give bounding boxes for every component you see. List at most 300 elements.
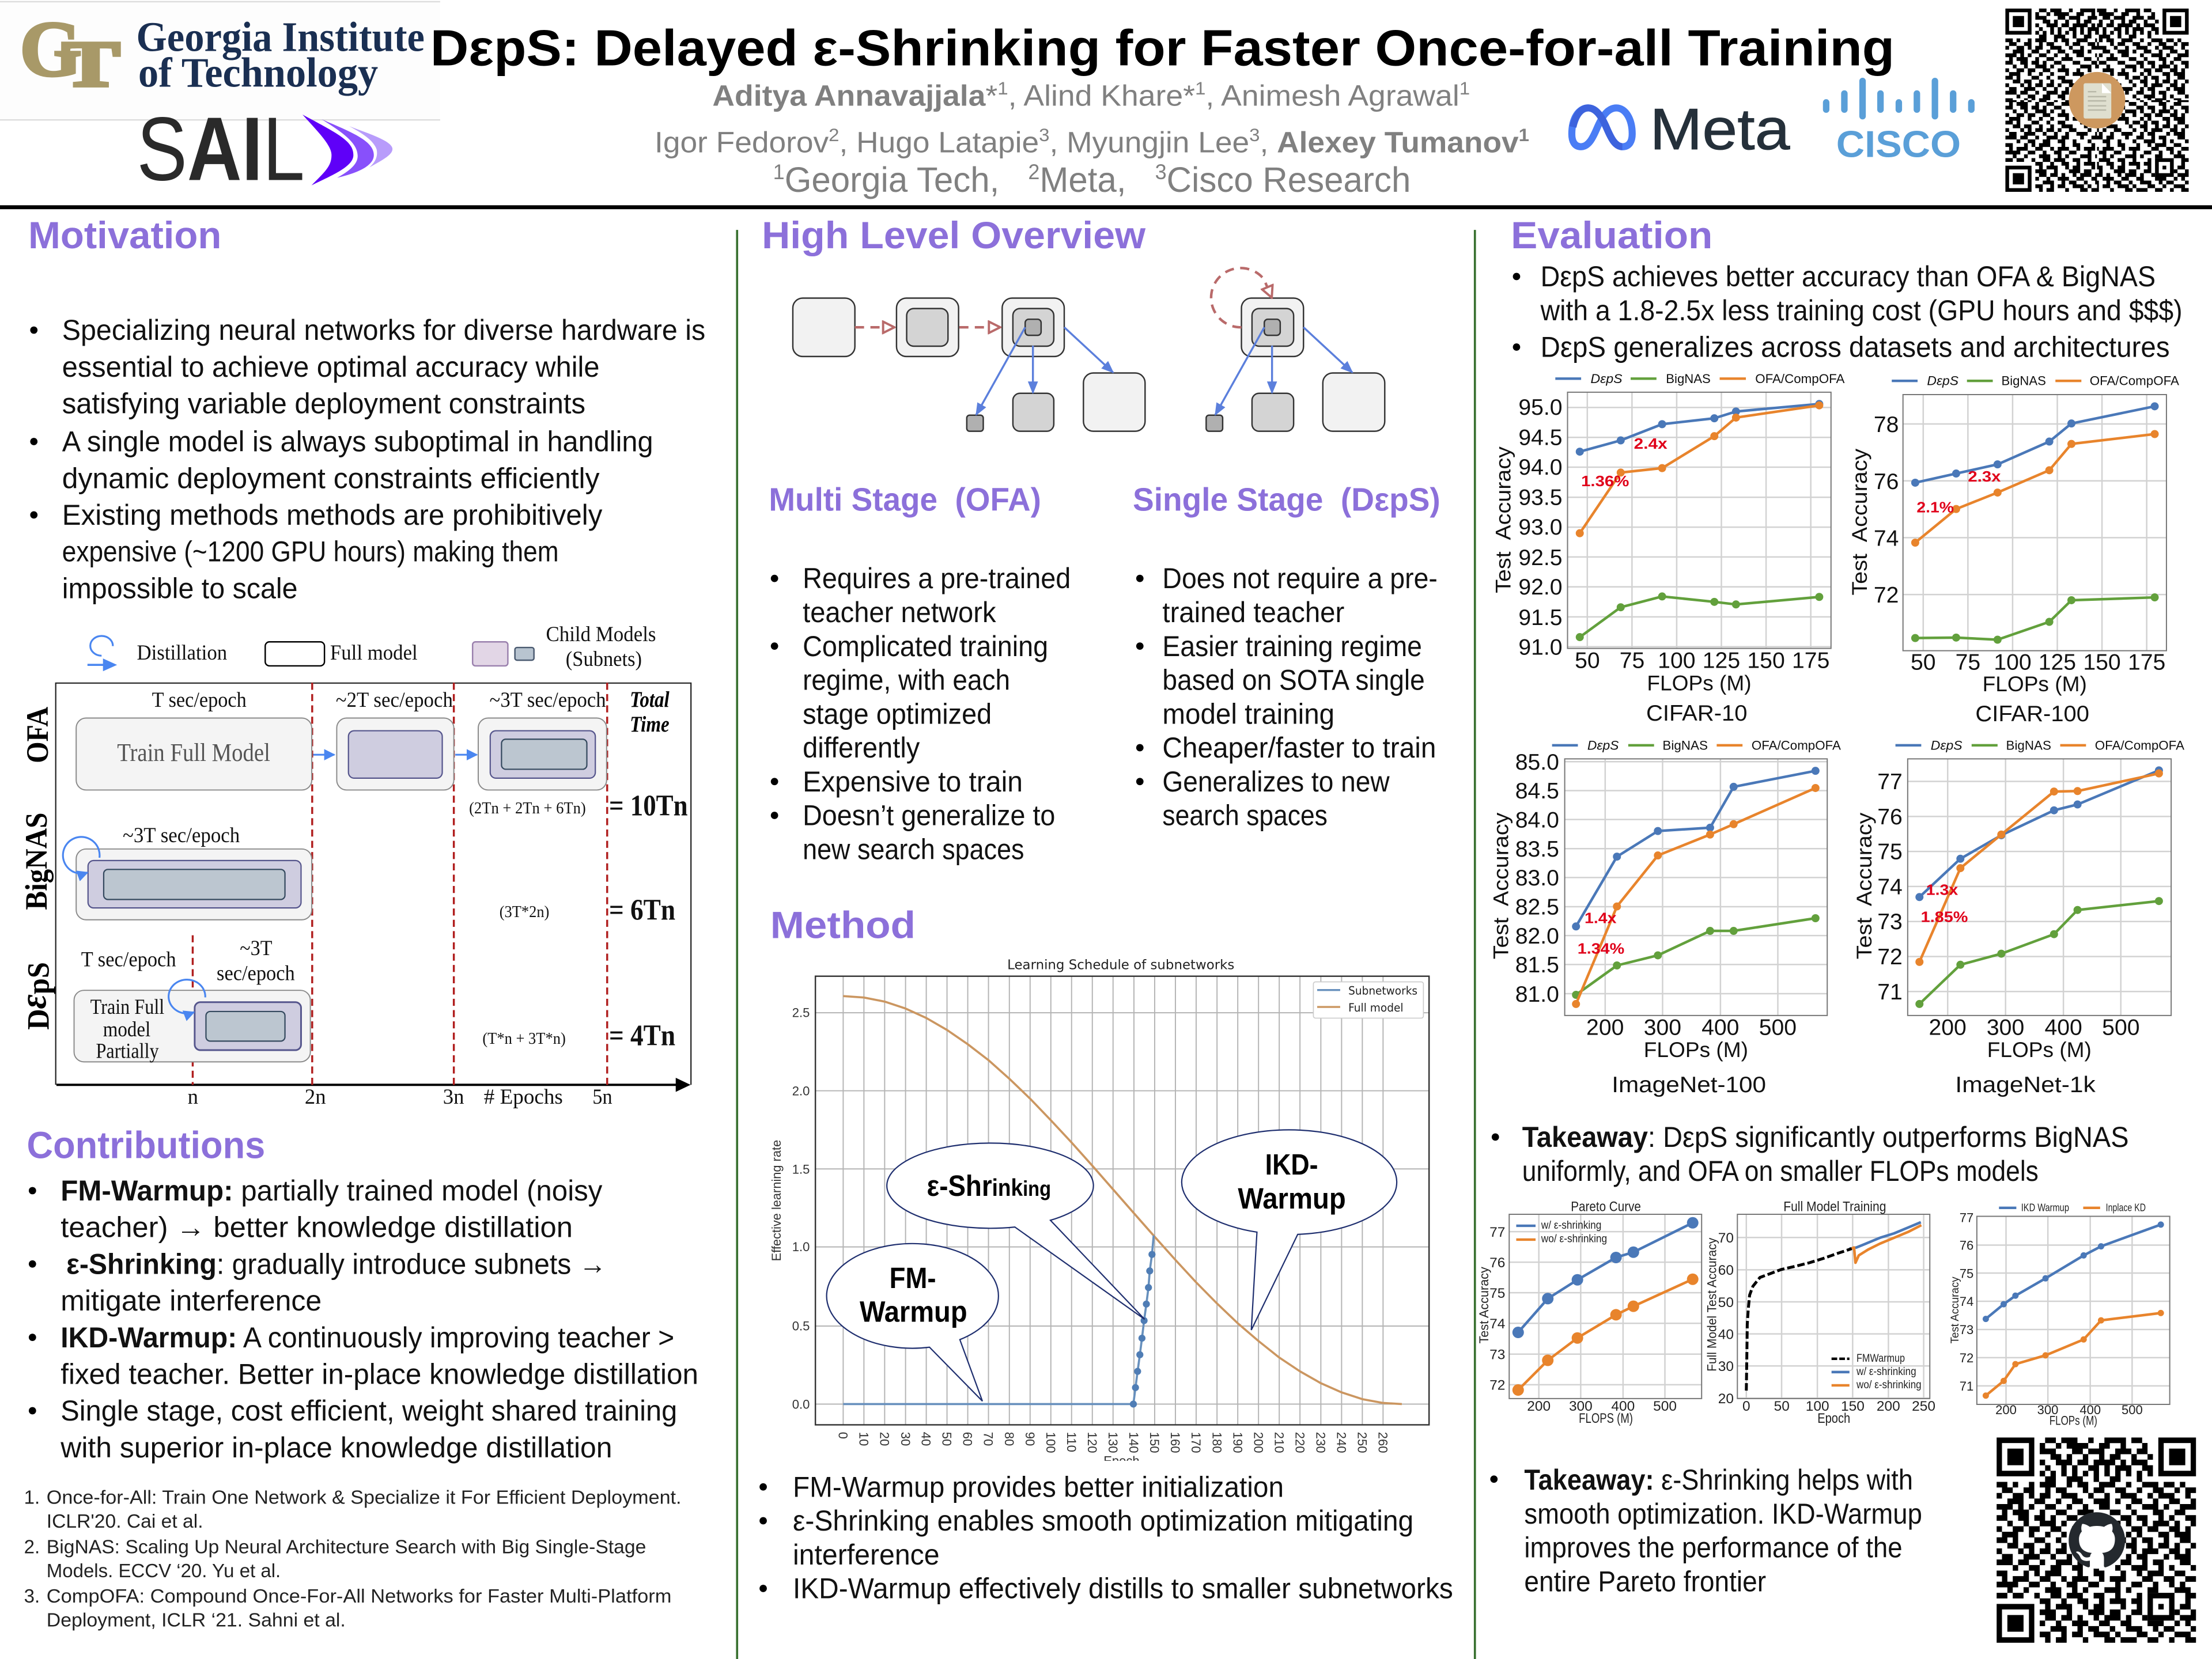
- chart: CIFAR-10: [1492, 372, 1845, 726]
- chart: CIFAR-10: 94.0: [1518, 455, 1563, 480]
- motivation bullets: satisfying variable deployment constraints: [62, 388, 585, 420]
- epoch axis labels: # Epochs: [484, 1085, 563, 1108]
- references: Models. ECCV ‘20. Yu et al.: [47, 1560, 281, 1582]
- chart: ImageNet-100: 81.0: [1515, 982, 1559, 1007]
- x axis tick labels: 160: [1168, 1432, 1182, 1453]
- authors line 1: 1: [997, 78, 1008, 99]
- chart: IKD Warmup vs Inplace KD: 500: [2122, 1403, 2143, 1417]
- motivation bullets: dynamic deployment constraints efficiently: [62, 462, 600, 494]
- heading: Evaluation: Evaluation: [1511, 214, 1712, 257]
- heading: Contributions: Contributions: [27, 1124, 265, 1167]
- title: DεpS: Delayed ε-Shrinking for Faster Once-for-all Training: [430, 19, 1895, 76]
- callout: e-Shrinking: ε-Shrinking: [927, 1169, 1051, 1202]
- chart: CIFAR-100: 150: [2083, 650, 2121, 675]
- chart: CIFAR-100: BigNAS: [2001, 374, 2046, 388]
- row: OFA: Train Full Model: [117, 738, 270, 767]
- chart: CIFAR-100: DεpS: [1927, 374, 1958, 388]
- row: DepS: (T*n + 3T*n): [482, 1030, 566, 1048]
- takeaway 1: [1492, 1121, 2129, 1187]
- chart: Full Model Training: [1704, 1199, 1935, 1426]
- chart: Full Model Training: 30: [1718, 1359, 1734, 1374]
- chart: Full Model Training: 70: [1718, 1230, 1734, 1246]
- chart: CIFAR-10: 150: [1747, 648, 1785, 673]
- single stage bullets: based on SOTA single: [1162, 664, 1425, 696]
- logo panel: Georgia Institute of Technology: of Technology: [138, 49, 378, 96]
- chart: ImageNet-100: 200: [1586, 1015, 1624, 1040]
- panel: motivation: [28, 214, 705, 604]
- chart: CIFAR-100: 2.3x: [1968, 469, 2001, 485]
- logo panel: Georgia Institute of Technology: G: [20, 5, 82, 93]
- chart: ImageNet-100: FLOPs (M): [1644, 1038, 1748, 1062]
- x axis tick labels: 210: [1272, 1432, 1286, 1453]
- chart: ImageNet-1k: 77: [1877, 770, 1903, 794]
- y axis tick labels: 0.0: [792, 1397, 810, 1411]
- callout: IKD-Warmup: IKD-: [1265, 1147, 1318, 1181]
- chart: Pareto Curve: Test Accuracy: [1477, 1267, 1491, 1343]
- chart legend: Subnetworks: [1348, 984, 1417, 998]
- chart: CIFAR-100: 72: [1874, 583, 1899, 608]
- affiliations: 3: [1155, 160, 1167, 184]
- chart: IKD Warmup vs Inplace KD: 200: [1995, 1403, 2017, 1417]
- x axis tick labels: 60: [961, 1432, 975, 1446]
- chart: IKD Warmup vs Inplace KD: [1949, 1201, 2170, 1428]
- x axis tick labels: 80: [1002, 1432, 1016, 1446]
- panel: contributions: [27, 1124, 698, 1464]
- references: 2.: [24, 1536, 40, 1558]
- takeaway 2: entire Pareto frontier: [1524, 1565, 1766, 1597]
- chart: CIFAR-100: 74: [1874, 527, 1899, 551]
- chart: IKD Warmup vs Inplace KD: 76: [1960, 1238, 1973, 1253]
- multi stage bullets: differently: [803, 732, 920, 764]
- chart: IKD Warmup vs Inplace KD: Test Accuracy: [1949, 1277, 1961, 1343]
- x axis tick labels: 230: [1314, 1432, 1328, 1453]
- x axis tick labels: 0: [836, 1432, 850, 1439]
- chart: CIFAR-10: 75: [1620, 648, 1644, 673]
- chart: Pareto Curve: 300: [1569, 1399, 1593, 1414]
- chart: IKD Warmup vs Inplace KD: Inplace KD: [2106, 1201, 2146, 1213]
- authors line 2: , Myungjin Lee: [1050, 125, 1249, 158]
- references: ICLR'20. Cai et al.: [47, 1511, 203, 1532]
- logo: Meta: [1572, 96, 1790, 162]
- chart: learning schedule of subnetworks: [769, 957, 1429, 1469]
- chart: CIFAR-100: OFA/CompOFA: [2090, 374, 2179, 388]
- references: [24, 1487, 682, 1631]
- chart: CIFAR-10: Test Accuracy: [1492, 446, 1515, 593]
- heading: High Level Overview: High Level Overview: [762, 214, 1146, 257]
- authors line 2: 3: [1249, 124, 1260, 145]
- chart: Full Model Training: 40: [1718, 1327, 1734, 1343]
- evaluation bullets: DεpS generalizes across datasets and architectures: [1541, 331, 2170, 363]
- row: OFA: ~2T sec/epoch: [336, 688, 453, 711]
- chart: Pareto Curve: w/ ε-shrinking: [1541, 1219, 1601, 1232]
- method bullets: interference: [793, 1539, 940, 1571]
- row: DepS: pS: [21, 962, 55, 994]
- x axis tick labels: 90: [1023, 1432, 1037, 1446]
- chart: IKD Warmup vs Inplace KD: 300: [2037, 1403, 2058, 1417]
- chart: Full Model Training: 20: [1718, 1391, 1734, 1407]
- motivation bullets: Existing methods methods are prohibitively: [62, 499, 602, 531]
- x axis tick labels: 20: [878, 1432, 892, 1446]
- row: BigNAS: BigNAS: [19, 813, 54, 910]
- heading: Method: Method: [770, 904, 916, 947]
- diagram legend: [88, 622, 656, 671]
- authors line 2: ,: [1260, 125, 1277, 158]
- chart: ImageNet-1k: BigNAS: [2006, 738, 2051, 752]
- row: DepS: ~3T: [240, 936, 273, 960]
- diagram: multi stage: [793, 298, 1145, 431]
- chart: CIFAR-10: 92.0: [1518, 575, 1563, 600]
- x axis tick labels: 200: [1251, 1432, 1265, 1453]
- chart: Pareto Curve: 500: [1653, 1399, 1677, 1414]
- multi stage bullets: Doesn’t generalize to: [803, 800, 1055, 832]
- chart: CIFAR-10: 93.5: [1518, 486, 1563, 510]
- authors line 1: , Animesh Agrawal: [1205, 79, 1459, 112]
- callout: FM-Warmup: Warmup: [860, 1294, 967, 1328]
- x axis tick labels: 130: [1106, 1432, 1120, 1453]
- chart: Pareto Curve: Pareto Curve: [1571, 1199, 1641, 1214]
- y axis tick labels: 2.5: [792, 1006, 810, 1020]
- diagram legend: Full model: [330, 641, 418, 664]
- row: BigNAS: ~3T sec/epoch: [123, 823, 240, 847]
- chart: CIFAR-100: 50: [1911, 650, 1936, 675]
- affiliations: 1: [773, 160, 785, 184]
- chart: CIFAR-10: 100: [1658, 648, 1696, 673]
- takeaway 2: improves the performance of the: [1524, 1532, 1903, 1564]
- contributions bullets: teacher) → better knowledge distillation: [61, 1211, 573, 1244]
- chart: CIFAR-100: [1848, 374, 2179, 726]
- affiliations: 2: [1028, 160, 1039, 184]
- x axis tick labels: [836, 1432, 1390, 1469]
- chart: IKD Warmup vs Inplace KD: 400: [2079, 1403, 2101, 1417]
- callout: FM-Warmup: [827, 1244, 999, 1401]
- chart: CIFAR-100: 75: [1956, 650, 1980, 675]
- heading: Motivation: Motivation: [28, 214, 221, 257]
- chart: ImageNet-100: 82.0: [1515, 924, 1559, 949]
- row: OFA: Time: [630, 712, 670, 737]
- chart: ImageNet-1k: 74: [1877, 874, 1903, 899]
- row: OFA: Total: [630, 687, 670, 712]
- chart: Pareto Curve: wo/ ε-shrinking: [1541, 1232, 1607, 1245]
- chart: Pareto Curve: 72: [1489, 1378, 1505, 1393]
- chart: ImageNet-1k: 73: [1877, 910, 1903, 934]
- takeaway 1: uniformly, and OFA on smaller FLOPs models: [1522, 1155, 2039, 1187]
- row: DepS: D: [21, 1007, 55, 1030]
- chart: Full Model Training: FMWarmup: [1856, 1352, 1905, 1365]
- logo: SAIL: SAIL: [137, 99, 305, 199]
- chart: ImageNet-100: 81.5: [1515, 953, 1559, 978]
- chart: ImageNet-100: BigNAS: [1662, 738, 1708, 752]
- chart: IKD Warmup vs Inplace KD: 75: [1960, 1266, 1973, 1281]
- chart: ImageNet-100: 85.0: [1515, 750, 1559, 775]
- chart: CIFAR-100: Test Accuracy: [1848, 448, 1871, 595]
- logo panel: Georgia Institute of Technology: [0, 1, 440, 120]
- row: DepS: T sec/epoch: [81, 948, 176, 971]
- chart: CIFAR-100: 78: [1874, 412, 1899, 437]
- chart: Pareto Curve: 77: [1489, 1225, 1505, 1240]
- timeline diagram: training time comparison: [13, 622, 691, 1108]
- contributions bullets: FM-Warmup: partially trained model (noisy: [61, 1175, 602, 1207]
- chart: CIFAR-100: 100: [1994, 650, 2032, 675]
- diagram legend: Child Models: [546, 622, 656, 646]
- contributions bullets: fixed teacher. Better in-place knowledge distillation: [61, 1358, 698, 1390]
- chart: Full Model Training: w/ ε-shrinking: [1856, 1365, 1916, 1378]
- authors line 2: 2: [829, 124, 840, 145]
- authors line 2: 1: [1519, 124, 1529, 145]
- x axis tick labels: 70: [981, 1432, 996, 1446]
- takeaway 2: smooth optimization. IKD-Warmup: [1524, 1498, 1922, 1530]
- row: OFA: T sec/epoch: [152, 688, 247, 711]
- chart: IKD Warmup vs Inplace KD: IKD Warmup: [2021, 1201, 2069, 1213]
- references: Once-for-All: Train One Network & Specialize it For Efficient Deployment.: [47, 1487, 682, 1509]
- chart: CIFAR-10: FLOPs (M): [1647, 671, 1752, 695]
- chart: CIFAR-10: 91.0: [1518, 635, 1563, 660]
- chart: ImageNet-1k: 400: [2045, 1015, 2082, 1040]
- single stage bullets: Cheaper/faster to train: [1162, 732, 1436, 764]
- row: BigNAS: (3T*2n): [500, 903, 549, 921]
- authors line 2: Igor Fedorov: [655, 125, 822, 158]
- chart frame and axis: [56, 683, 691, 1092]
- chart: ImageNet-100: 1.4x: [1585, 911, 1617, 927]
- chart: Full Model Training: 150: [1841, 1399, 1865, 1414]
- single stage bullets: [1136, 562, 1438, 832]
- callout: e-Shrinking: [887, 1143, 1145, 1319]
- contributions bullets: mitigate interference: [61, 1285, 322, 1317]
- contributions bullets: IKD-Warmup: A continuously improving teacher >: [61, 1321, 674, 1354]
- chart: CIFAR-10: 50: [1575, 648, 1600, 673]
- logo: SAIL: [137, 99, 392, 199]
- subnetworks curve: [843, 1236, 1155, 1408]
- authors line 2: 3: [1039, 124, 1050, 145]
- chart: Pareto Curve: 200: [1527, 1399, 1551, 1414]
- chart: Full Model Training: Full Model Training: [1783, 1199, 1886, 1214]
- row: OFA: = 10Tn: [609, 790, 688, 823]
- single stage bullets: model training: [1162, 698, 1334, 730]
- subheading: Single Stage: Single Stage (DεpS): [1133, 482, 1440, 518]
- chart: CIFAR-10: BigNAS: [1666, 372, 1711, 386]
- method bullets: FM-Warmup provides better initialization: [793, 1471, 1284, 1503]
- chart: Full Model Training: 50: [1774, 1399, 1790, 1414]
- single stage bullets: trained teacher: [1162, 596, 1344, 628]
- row: OFA: OFA: [20, 707, 55, 763]
- chart: ImageNet-100: 82.5: [1515, 895, 1559, 920]
- authors line 1: 1: [1195, 78, 1205, 99]
- multi stage bullets: teacher network: [803, 596, 996, 628]
- chart: CIFAR-10: DεpS: [1591, 372, 1623, 386]
- chart: ImageNet-100: 1.34%: [1578, 941, 1624, 957]
- row: OFA: [20, 687, 688, 823]
- x axis tick labels: 150: [1147, 1432, 1162, 1453]
- chart legend: Full model: [1348, 1001, 1404, 1014]
- chart: Pareto Curve: 75: [1489, 1286, 1505, 1301]
- chart: ImageNet-1k: ImageNet-1k: [1955, 1073, 2096, 1097]
- chart: ImageNet-100: 84.5: [1515, 779, 1559, 804]
- chart: ImageNet-1k: 500: [2102, 1015, 2140, 1040]
- chart: CIFAR-10: 175: [1792, 648, 1829, 673]
- contributions bullets: [29, 1175, 698, 1464]
- x axis tick labels: 100: [1043, 1432, 1058, 1453]
- method bullets: IKD-Warmup effectively distills to smaller subnetworks: [793, 1573, 1453, 1605]
- evaluation bullets: DεpS achieves better accuracy than OFA & BigNAS: [1541, 260, 2156, 293]
- chart: CIFAR-100: 2.1%: [1916, 499, 1954, 516]
- x axis tick labels: 260: [1376, 1432, 1390, 1453]
- motivation bullets: expensive (~1200 GPU hours) making them: [62, 536, 559, 568]
- motivation bullets: impossible to scale: [62, 572, 298, 604]
- chart: ImageNet-100: 83.0: [1515, 866, 1559, 891]
- logo panel: Georgia Institute of Technology: T: [62, 29, 120, 100]
- subheading: Multi Stage: Multi Stage (OFA): [769, 482, 1041, 518]
- row: BigNAS: [19, 813, 675, 927]
- single stage bullets: Does not require a pre-: [1162, 562, 1438, 594]
- logo: Cisco: [1826, 81, 1971, 165]
- contributions bullets: Single stage, cost efficient, weight shared training: [61, 1395, 677, 1427]
- chart: Full Model Training: 100: [1806, 1399, 1829, 1414]
- chart: learning schedule of subnetworks: Learning Schedule of subnetworks: [1007, 957, 1234, 972]
- panel: high level overview: [762, 214, 1440, 865]
- row: OFA: (2Tn + 2Tn + 6Tn): [469, 800, 586, 817]
- chart: Pareto Curve: [1477, 1199, 1701, 1426]
- logo panel: Georgia Institute of Technology: Georgia Institute: [137, 14, 425, 60]
- y axis tick labels: 1.0: [792, 1240, 810, 1254]
- chart: ImageNet-100: 400: [1701, 1015, 1739, 1040]
- chart: ImageNet-100: DεpS: [1587, 738, 1619, 752]
- x axis tick labels: 40: [919, 1432, 933, 1446]
- authors line 1: 1: [1459, 78, 1470, 99]
- chart: CIFAR-100: 76: [1874, 469, 1899, 494]
- motivation bullets: A single model is always suboptimal in handling: [62, 426, 653, 458]
- row: BigNAS: = 6Tn: [609, 894, 675, 927]
- panel: method: [759, 904, 1453, 1605]
- multi stage bullets: [771, 562, 1071, 865]
- chart: CIFAR-10: 95.0: [1518, 395, 1563, 420]
- chart: CIFAR-100: CIFAR-100: [1975, 702, 2089, 726]
- x axis tick labels: 250: [1355, 1432, 1370, 1453]
- chart: Full Model Training: Full Model Test Accuracy: [1704, 1238, 1719, 1372]
- motivation bullets: essential to achieve optimal accuracy while: [62, 351, 600, 383]
- chart: ImageNet-1k: Test Accuracy: [1852, 812, 1876, 959]
- row: DepS: Train Full: [90, 995, 164, 1018]
- chart: CIFAR-10: 91.5: [1518, 605, 1563, 630]
- multi stage bullets: Complicated training: [803, 630, 1048, 662]
- chart: ImageNet-1k: 1.3x: [1926, 882, 1958, 899]
- takeaway 2: [1490, 1464, 1922, 1597]
- multi stage bullets: regime, with each: [803, 664, 1010, 696]
- x axis tick labels: 110: [1064, 1432, 1079, 1452]
- diagram legend: (Subnets): [566, 647, 642, 671]
- authors line 1: Aditya Annavajjala *: [712, 79, 997, 112]
- chart: Full Model Training: 50: [1718, 1295, 1734, 1310]
- chart: IKD Warmup vs Inplace KD: FLOPs (M): [2050, 1414, 2097, 1428]
- x axis tick labels: 140: [1126, 1432, 1141, 1453]
- chart: ImageNet-1k: DεpS: [1931, 738, 1963, 752]
- chart: Pareto Curve: 76: [1489, 1255, 1505, 1271]
- multi stage bullets: stage optimized: [803, 698, 992, 730]
- epoch axis labels: n: [188, 1085, 198, 1108]
- method bullets: [759, 1471, 1453, 1605]
- chart: ImageNet-100: Test Accuracy: [1489, 812, 1513, 959]
- affiliations: Georgia Tech,: [785, 160, 1028, 199]
- authors line 2: , Hugo Latapie: [840, 125, 1039, 158]
- authors line 1: , Alind Khare*: [1008, 79, 1195, 112]
- x axis tick labels: 240: [1334, 1432, 1349, 1453]
- x axis tick labels: 170: [1189, 1432, 1203, 1453]
- chart: Pareto Curve: 74: [1489, 1316, 1505, 1332]
- motivation bullets: [30, 314, 705, 604]
- chart: ImageNet-1k: 1.85%: [1921, 909, 1968, 925]
- row: DepS: sec/epoch: [217, 961, 295, 984]
- chart: Pareto Curve: 73: [1489, 1347, 1505, 1363]
- chart: CIFAR-10: 94.5: [1518, 426, 1563, 450]
- y axis tick labels: Effective learning rate: [769, 1140, 784, 1261]
- row: OFA: ~3T sec/epoch: [490, 688, 606, 711]
- single stage bullets: search spaces: [1162, 800, 1328, 832]
- method bullets: ε-Shrinking enables smooth optimization mitigating: [793, 1505, 1413, 1537]
- diagram legend: Distillation: [137, 641, 227, 664]
- epoch axis labels: 5n: [592, 1085, 612, 1108]
- chart: CIFAR-10: 2.4x: [1634, 436, 1668, 452]
- chart: CIFAR-10: 1.36%: [1581, 474, 1629, 490]
- takeaway 1: Takeaway: DεpS significantly outperforms BigNAS: [1522, 1121, 2129, 1153]
- chart: ImageNet-100: 500: [1759, 1015, 1797, 1040]
- x axis tick labels: 120: [1085, 1432, 1099, 1453]
- chart: Pareto Curve: FLOPS (M): [1579, 1411, 1633, 1426]
- chart: ImageNet-1k: 72: [1877, 945, 1903, 969]
- chart: Pareto Curve: 400: [1611, 1399, 1635, 1414]
- x axis tick labels: 30: [898, 1432, 913, 1446]
- chart: IKD Warmup vs Inplace KD: 71: [1960, 1379, 1973, 1393]
- multi stage bullets: Expensive to train: [803, 766, 1023, 798]
- row: DepS: [13, 936, 675, 1063]
- x axis tick labels: 180: [1209, 1432, 1224, 1453]
- chart: ImageNet-1k: 200: [1929, 1015, 1967, 1040]
- epoch axis labels: 3n: [443, 1085, 464, 1108]
- chart: ImageNet-1k: 76: [1877, 805, 1903, 830]
- logo: Cisco: CISCO: [1836, 123, 1961, 165]
- row: DepS: ε: [13, 994, 55, 1009]
- epoch axis labels: 2n: [305, 1085, 326, 1108]
- x axis tick labels: 10: [857, 1432, 871, 1446]
- chart: IKD Warmup vs Inplace KD: 74: [1960, 1294, 1973, 1309]
- y axis tick labels: [769, 1006, 810, 1411]
- contributions bullets: ε-Shrinking: gradually introduce subnets →: [66, 1248, 607, 1280]
- chart: CIFAR-100: FLOPs (M): [1983, 672, 2087, 696]
- x axis tick labels: 190: [1230, 1432, 1245, 1453]
- chart: ImageNet-100: 83.5: [1515, 837, 1559, 862]
- chart: Full Model Training: 60: [1718, 1263, 1734, 1278]
- chart: IKD Warmup vs Inplace KD: 72: [1960, 1351, 1973, 1365]
- chart: CIFAR-10: OFA/CompOFA: [1755, 372, 1845, 386]
- contributions bullets: with superior in-place knowledge distillation: [60, 1431, 612, 1464]
- evaluation bullets: [1513, 260, 2183, 363]
- logo: Meta: Meta: [1650, 96, 1790, 162]
- chart: Full Model Training: 250: [1912, 1399, 1935, 1414]
- chart: ImageNet-1k: 300: [1987, 1015, 2024, 1040]
- header banner: [0, 1, 2212, 209]
- chart: ImageNet-1k: OFA/CompOFA: [2095, 738, 2184, 752]
- chart: CIFAR-100: 175: [2128, 650, 2165, 675]
- chart: ImageNet-100: 84.0: [1515, 808, 1559, 832]
- chart: ImageNet-1k: FLOPs (M): [1987, 1038, 2092, 1062]
- callout: FM-Warmup: FM-: [890, 1261, 936, 1294]
- affiliations: Cisco Research: [1167, 160, 1411, 199]
- references: 1.: [24, 1487, 40, 1509]
- chart: CIFAR-10: 125: [1703, 648, 1740, 673]
- chart: CIFAR-10: CIFAR-10: [1646, 701, 1748, 726]
- diagram: single stage: [1206, 268, 1385, 431]
- chart: ImageNet-1k: [1852, 738, 2184, 1097]
- y axis tick labels: 0.5: [792, 1319, 810, 1333]
- chart: IKD Warmup vs Inplace KD: 73: [1960, 1323, 1973, 1337]
- single stage bullets: Easier training regime: [1162, 630, 1422, 662]
